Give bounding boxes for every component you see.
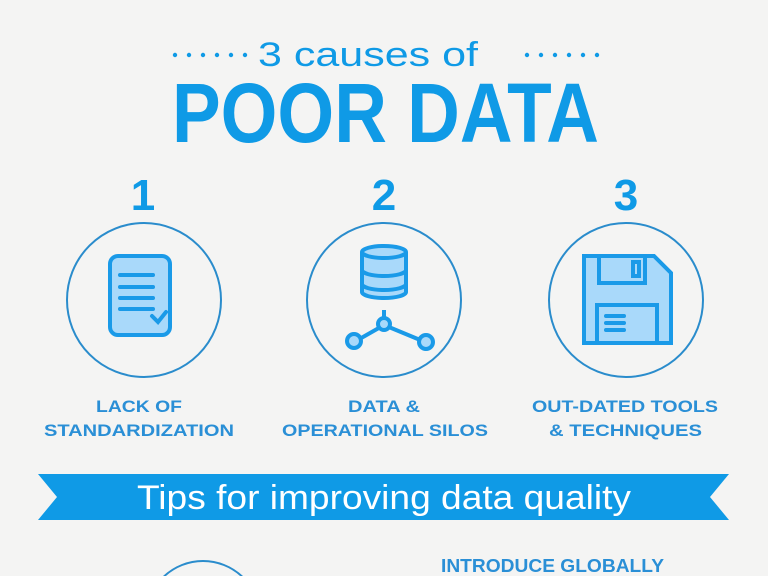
cause 1: STANDARDIZATION <box>44 421 234 440</box>
banner: tips: Tips for improving data quality <box>137 479 631 517</box>
subtitle: 3 causes of <box>173 36 599 74</box>
cause 3: & TECHNIQUES <box>549 421 702 440</box>
cause 3 <box>532 171 718 440</box>
cause 2: OPERATIONAL SILOS <box>282 421 488 440</box>
banner: tips <box>38 474 729 520</box>
cause 1: LACK OF <box>96 397 182 416</box>
cause 2: 2 <box>372 171 396 220</box>
subtitle: 3 causes of: 3 causes of <box>258 36 479 74</box>
tip circle (partial) <box>146 561 260 576</box>
icon: floppy disk <box>584 256 671 343</box>
cause 1: 1 <box>131 171 155 220</box>
cause 3: 3 <box>614 171 638 220</box>
cause 1 <box>44 171 234 440</box>
cause 2 <box>282 171 488 440</box>
cause 3: OUT-DATED TOOLS <box>532 397 718 416</box>
icon: database network <box>347 246 433 349</box>
icon: document with check <box>110 256 170 335</box>
title: POOR DATA: POOR DATA <box>172 66 599 160</box>
cause 2: DATA & <box>348 397 420 416</box>
tip heading: INTRODUCE GLOBALLY <box>441 556 664 576</box>
